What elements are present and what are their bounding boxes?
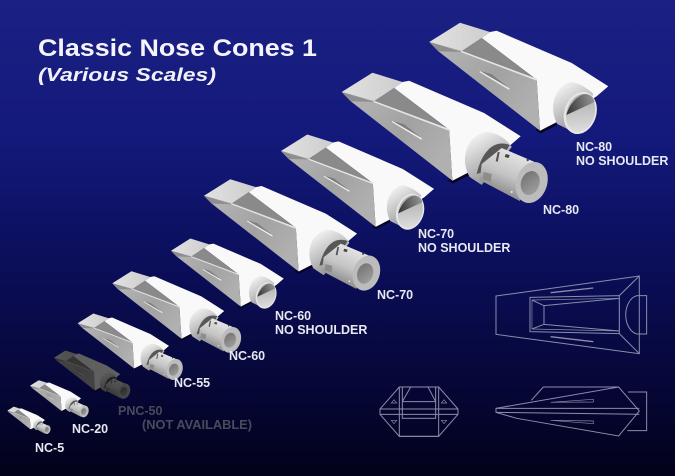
cone: PNC-50: [54, 351, 132, 400]
label: NC-80 no shoulder: NC-80: [576, 140, 612, 154]
cone: NC-20: [30, 380, 90, 419]
label: NC-70 no shoulder: NC-70: [418, 227, 454, 241]
cone: NC-60 no shoulder: [171, 239, 284, 311]
subtitle: (Various Scales): [38, 65, 216, 85]
title: Classic Nose Cones 1: [38, 35, 317, 62]
cone: NC-80: [342, 73, 553, 207]
diagram: end view: [380, 387, 458, 436]
label: PNC-50 not available: (NOT AVAILABLE): [142, 418, 252, 432]
label: NC-55: NC-55: [174, 376, 210, 390]
cone: NC-70 no shoulder: [281, 134, 434, 233]
label: PNC-50 not available: PNC-50: [118, 404, 162, 418]
label: NC-80: NC-80: [543, 203, 579, 217]
label: NC-60 no shoulder: NC-60: [275, 309, 311, 323]
label: NC-60: NC-60: [229, 349, 265, 363]
label: NC-80 no shoulder: NO SHOULDER: [576, 154, 668, 168]
diagram: side view: [496, 387, 647, 436]
label: NC-70 no shoulder: NO SHOULDER: [418, 241, 510, 255]
cone: NC-5: [7, 407, 52, 435]
cone: NC-70: [204, 179, 385, 294]
diagram: top view: [496, 276, 647, 354]
label: NC-70: NC-70: [377, 288, 413, 302]
label: NC-5: NC-5: [35, 441, 64, 455]
label: NC-20: NC-20: [72, 422, 108, 436]
cone: NC-55: [78, 313, 185, 382]
label: NC-60 no shoulder: NO SHOULDER: [275, 323, 367, 337]
cone: NC-60: [112, 271, 244, 355]
cone: NC-80 no shoulder: [429, 23, 608, 138]
